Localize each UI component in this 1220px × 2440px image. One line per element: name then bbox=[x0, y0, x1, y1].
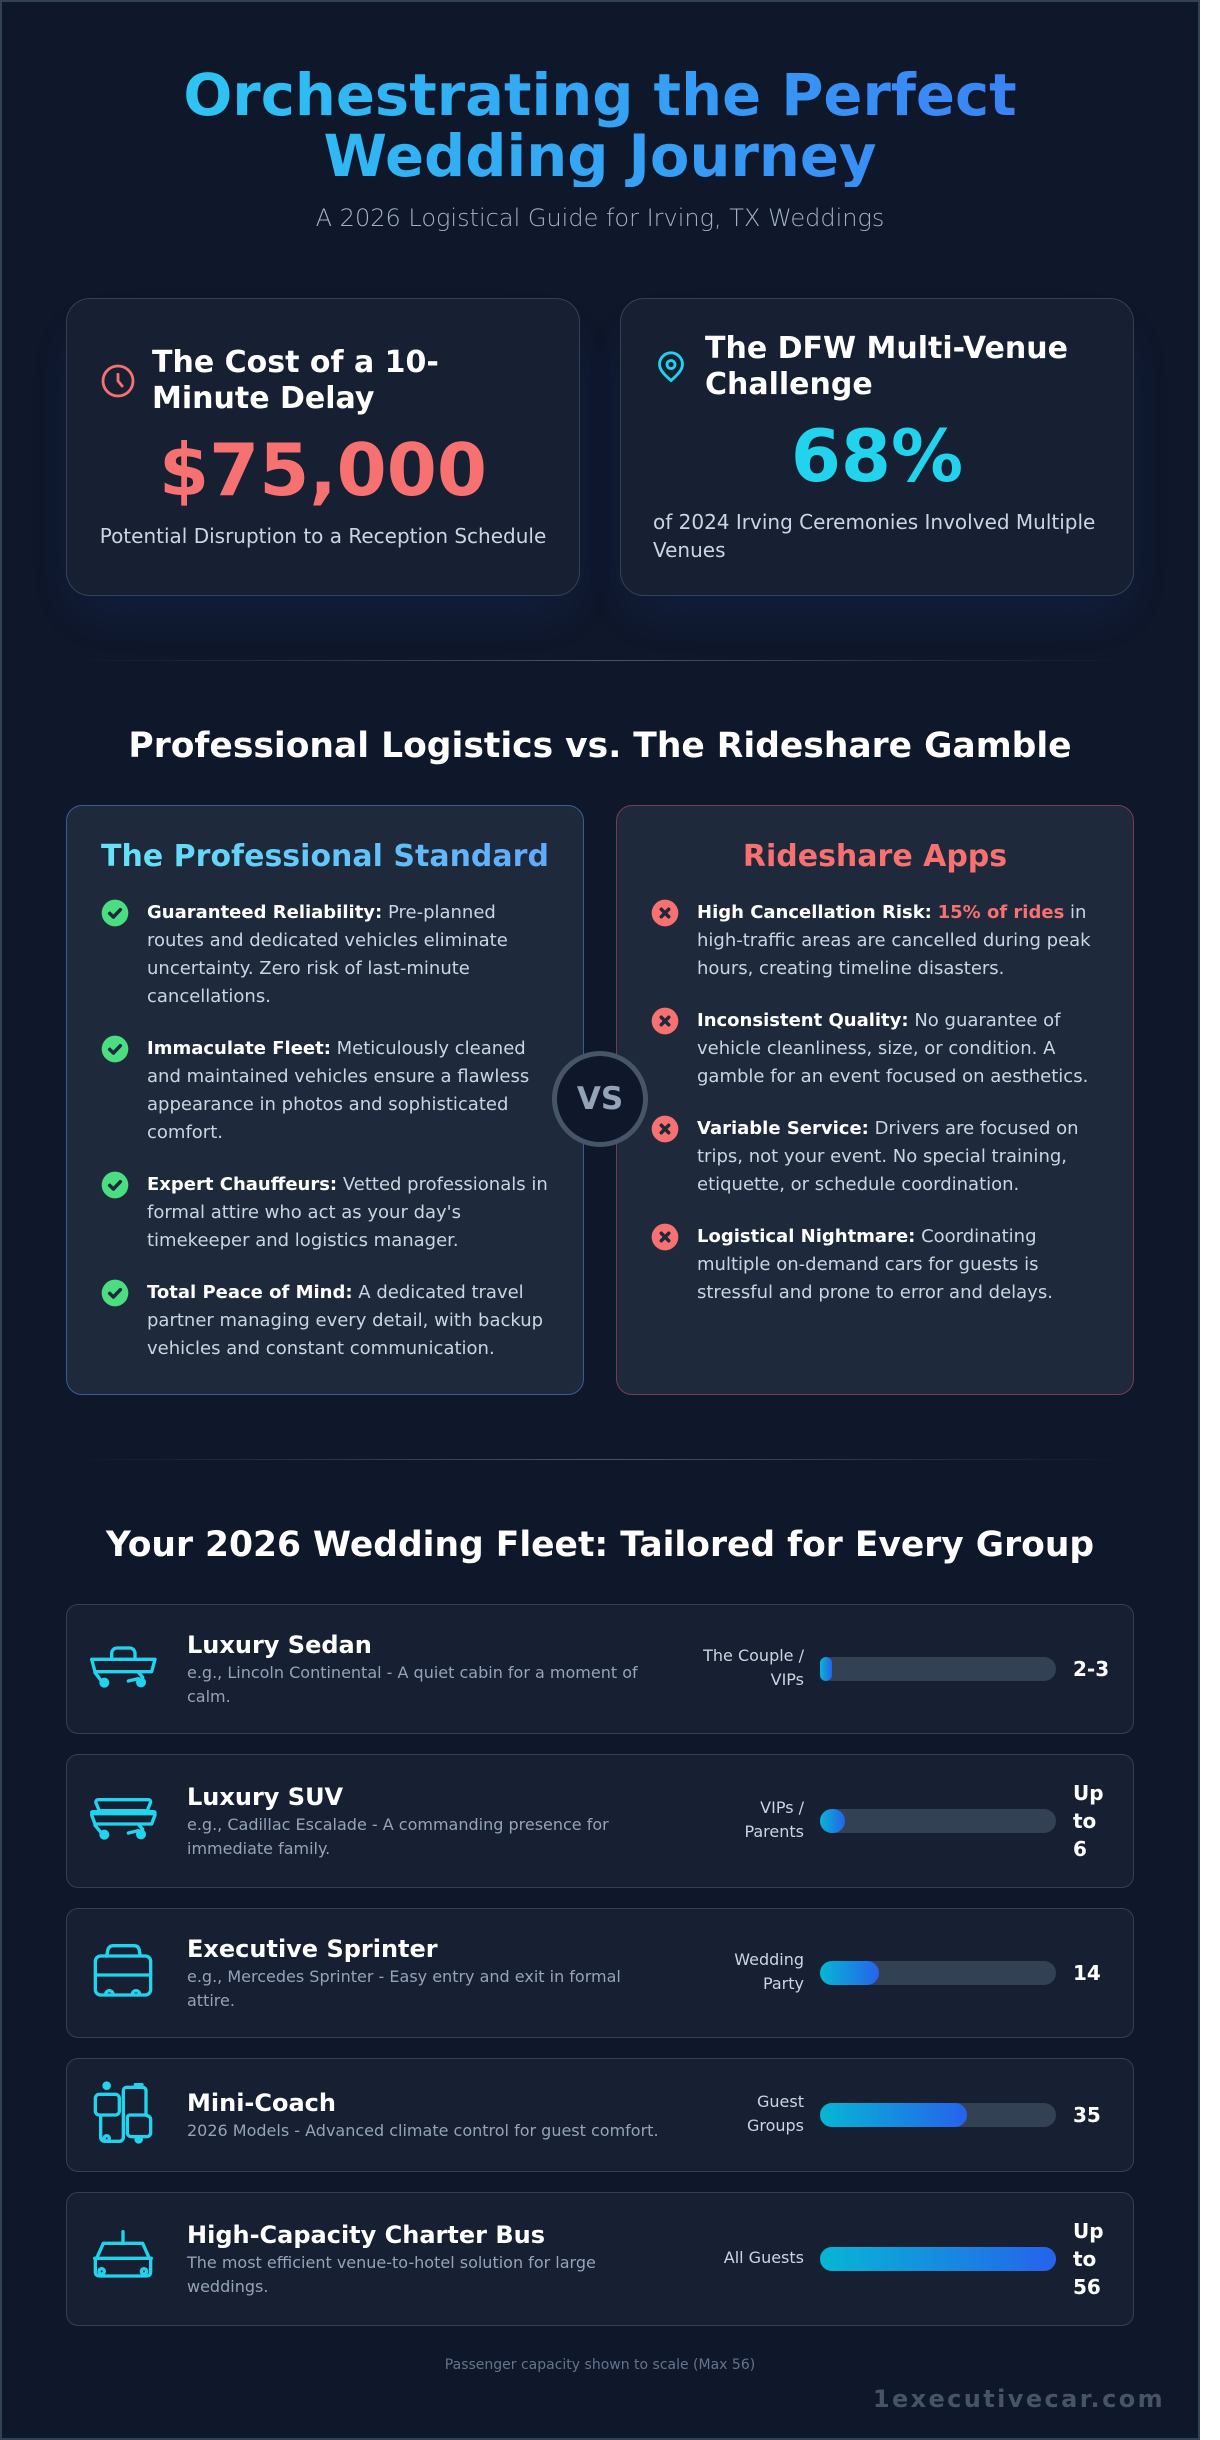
vehicle text: immediate family. bbox=[187, 1839, 330, 1858]
vehicle text: attire. bbox=[187, 1991, 235, 2010]
card heading bbox=[152, 345, 439, 416]
icon: suv bbox=[90, 1798, 157, 1840]
title: Wedding Journey bbox=[323, 122, 877, 190]
capacity value: Up bbox=[1073, 2219, 1104, 2243]
capacity value: 35 bbox=[1073, 2103, 1101, 2127]
card heading: The Cost of a 10- bbox=[152, 345, 439, 380]
capacity value bbox=[1073, 2219, 1104, 2299]
capacity value: 2-3 bbox=[1073, 1657, 1109, 1681]
subtitle: A 2026 Logistical Guide for Irving, TX Weddings bbox=[316, 204, 884, 232]
item: cancellation: hours, creating timeline disasters. bbox=[697, 958, 1004, 979]
capacity value: 14 bbox=[1073, 1961, 1101, 1985]
panel heading: Rideshare Apps bbox=[743, 839, 1007, 874]
item: reliability: Guaranteed Reliability: Pre-planned bbox=[147, 902, 496, 923]
vs badge: VS bbox=[577, 1081, 623, 1117]
card heading: Challenge bbox=[705, 367, 873, 402]
icon: check bbox=[102, 1036, 128, 1062]
audience label: Parents bbox=[744, 1822, 804, 1841]
fleet row: mini-coach bbox=[66, 2058, 1134, 2172]
capacity bar bbox=[820, 2247, 1056, 2271]
section heading: comparison: Professional Logistics vs. The Rideshare Gamble bbox=[128, 726, 1072, 766]
stat description: Venues bbox=[653, 538, 726, 562]
watermark: 1executivecar.com bbox=[873, 2385, 1165, 2413]
icon: sprinter bbox=[94, 1944, 152, 1997]
item: service: Variable Service: Drivers are focused on bbox=[697, 1118, 1079, 1139]
vehicle text: High-Capacity Charter Bus bbox=[187, 2221, 545, 2249]
item: quality bbox=[652, 1008, 1088, 1087]
fleet row: executive sprinter bbox=[66, 1908, 1134, 2038]
icon: cross bbox=[652, 900, 678, 926]
item: service bbox=[652, 1116, 1079, 1195]
capacity value bbox=[1073, 1781, 1104, 1861]
item: quality: vehicle cleanliness, size, or condition. A bbox=[697, 1038, 1055, 1059]
item: peace of mind: partner managing every detail, with backup bbox=[147, 1310, 543, 1331]
item: chauffeurs bbox=[102, 1172, 548, 1251]
vehicle text: Mini-Coach bbox=[187, 2089, 336, 2117]
card heading: The DFW Multi-Venue bbox=[705, 331, 1068, 366]
item: service: etiquette, or schedule coordination. bbox=[697, 1174, 1019, 1195]
capacity value: 6 bbox=[1073, 1837, 1087, 1861]
capacity value: to bbox=[1073, 2247, 1096, 2271]
item: fleet: appearance in photos and sophisticated bbox=[147, 1094, 508, 1115]
fleet row: luxury sedan bbox=[66, 1604, 1134, 1734]
capacity bar bbox=[820, 2103, 1056, 2127]
item: reliability bbox=[102, 900, 508, 1007]
section heading: fleet: Your 2026 Wedding Fleet: Tailored for Every Group bbox=[106, 1525, 1094, 1565]
audience label bbox=[734, 1950, 804, 1993]
fleet row: luxury suv bbox=[66, 1754, 1134, 1888]
audience label: Party bbox=[763, 1974, 804, 1993]
capacity bar bbox=[820, 1809, 1056, 1833]
item: cancellation: high-traffic areas are cancelled during peak bbox=[697, 930, 1091, 951]
item: peace of mind: Total Peace of Mind: A dedicated travel bbox=[147, 1282, 524, 1303]
vehicle text: Luxury Sedan bbox=[187, 1631, 372, 1659]
audience label bbox=[703, 1646, 804, 1689]
item: cancellation bbox=[652, 900, 1091, 979]
icon: map pin bbox=[658, 351, 684, 382]
title: Orchestrating the Perfect bbox=[183, 62, 1017, 129]
vehicle text: Luxury SUV bbox=[187, 1783, 343, 1811]
item: fleet bbox=[102, 1036, 529, 1143]
icon: charter bus bbox=[93, 2230, 153, 2278]
icon: cross bbox=[652, 1224, 678, 1250]
stat value: 68% bbox=[791, 414, 963, 498]
audience label: Guest bbox=[757, 2092, 804, 2111]
vehicle text bbox=[186, 2221, 596, 2296]
item: reliability: uncertainty. Zero risk of last-minute bbox=[147, 958, 470, 979]
vehicle text: e.g., Mercedes Sprinter - Easy entry and exit in formal bbox=[187, 1967, 621, 1986]
vehicle text: The most efficient venue-to-hotel solution for large bbox=[187, 2253, 596, 2272]
audience label bbox=[747, 2092, 804, 2135]
vehicle text bbox=[187, 1631, 638, 1706]
stat card: multi-venue bbox=[620, 298, 1134, 596]
panel: professional standard bbox=[66, 805, 584, 1395]
icon: clock bbox=[102, 364, 134, 398]
vehicle text: e.g., Cadillac Escalade - A commanding presence for bbox=[187, 1815, 609, 1834]
capacity value: to bbox=[1073, 1809, 1096, 1833]
audience label: All Guests bbox=[724, 2248, 804, 2267]
vehicle text: e.g., Lincoln Continental - A quiet cabin for a moment of bbox=[187, 1663, 638, 1682]
item: fleet: Immaculate Fleet: Meticulously cleaned bbox=[147, 1038, 526, 1059]
capacity value: 56 bbox=[1073, 2275, 1101, 2299]
capacity bar bbox=[820, 1657, 1056, 1681]
item: nightmare bbox=[652, 1224, 1053, 1303]
panel: rideshare apps bbox=[616, 805, 1134, 1395]
card heading bbox=[705, 331, 1068, 402]
capacity value: Up bbox=[1073, 1781, 1104, 1805]
item: nightmare: Logistical Nightmare: Coordinating bbox=[697, 1226, 1037, 1247]
fleet row: charter bus bbox=[66, 2192, 1134, 2326]
vs badge bbox=[552, 1051, 648, 1147]
footnote: Passenger capacity shown to scale (Max 56) bbox=[445, 2357, 755, 2373]
item: cancellation: High Cancellation Risk: 15% of rides in bbox=[697, 902, 1086, 923]
vehicle text bbox=[187, 1783, 609, 1858]
item: fleet: and maintained vehicles ensure a flawless bbox=[147, 1066, 529, 1087]
item: peace of mind: vehicles and constant communication. bbox=[147, 1338, 495, 1359]
audience label: Groups bbox=[747, 2116, 804, 2135]
icon: sedan bbox=[90, 1646, 157, 1688]
audience label: VIPs bbox=[771, 1670, 804, 1689]
title bbox=[176, 66, 1024, 187]
card heading: Minute Delay bbox=[152, 381, 374, 416]
vehicle text bbox=[187, 1935, 621, 2010]
item: reliability: routes and dedicated vehicles eliminate bbox=[147, 930, 508, 951]
audience label bbox=[744, 1798, 804, 1841]
item: nightmare: stressful and prone to error and delays. bbox=[697, 1282, 1053, 1303]
icon: check bbox=[102, 1172, 128, 1198]
stat value: $75,000 bbox=[159, 428, 487, 512]
panel heading: The Professional Standard bbox=[101, 839, 549, 874]
vehicle text: Executive Sprinter bbox=[187, 1935, 438, 1963]
stat description bbox=[653, 510, 1095, 562]
vehicle text bbox=[187, 2089, 659, 2140]
item: chauffeurs: timekeeper and logistics manager. bbox=[147, 1230, 459, 1251]
vehicle text: weddings. bbox=[187, 2277, 268, 2296]
item: peace of mind bbox=[102, 1280, 543, 1359]
icon: check bbox=[102, 900, 128, 926]
item: quality: gamble for an event focused on aesthetics. bbox=[697, 1066, 1088, 1087]
icon: cross bbox=[652, 1116, 678, 1142]
vehicle text: calm. bbox=[187, 1687, 231, 1706]
audience label: VIPs / bbox=[760, 1798, 804, 1817]
audience label: The Couple / bbox=[703, 1646, 804, 1665]
item: service: trips, not your event. No special training, bbox=[697, 1146, 1067, 1167]
icon: mini-coach bbox=[94, 2081, 152, 2144]
item: fleet: comfort. bbox=[147, 1122, 223, 1143]
capacity bar bbox=[820, 1961, 1056, 1985]
icon: check bbox=[102, 1280, 128, 1306]
item: chauffeurs: formal attire who act as your day's bbox=[147, 1202, 461, 1223]
item: reliability: cancellations. bbox=[147, 986, 271, 1007]
stat description: Potential Disruption to a Reception Schedule bbox=[100, 524, 546, 548]
vehicle text: 2026 Models - Advanced climate control for guest comfort. bbox=[187, 2121, 659, 2140]
audience label: Wedding bbox=[734, 1950, 804, 1969]
icon: cross bbox=[652, 1008, 678, 1034]
item: nightmare: multiple on-demand cars for guests is bbox=[697, 1254, 1038, 1275]
item: quality: Inconsistent Quality: No guarantee of bbox=[697, 1010, 1061, 1031]
stat description: of 2024 Irving Ceremonies Involved Multiple bbox=[653, 510, 1095, 534]
stat card: delay cost bbox=[66, 298, 580, 596]
item: chauffeurs: Expert Chauffeurs: Vetted professionals in bbox=[147, 1174, 548, 1195]
